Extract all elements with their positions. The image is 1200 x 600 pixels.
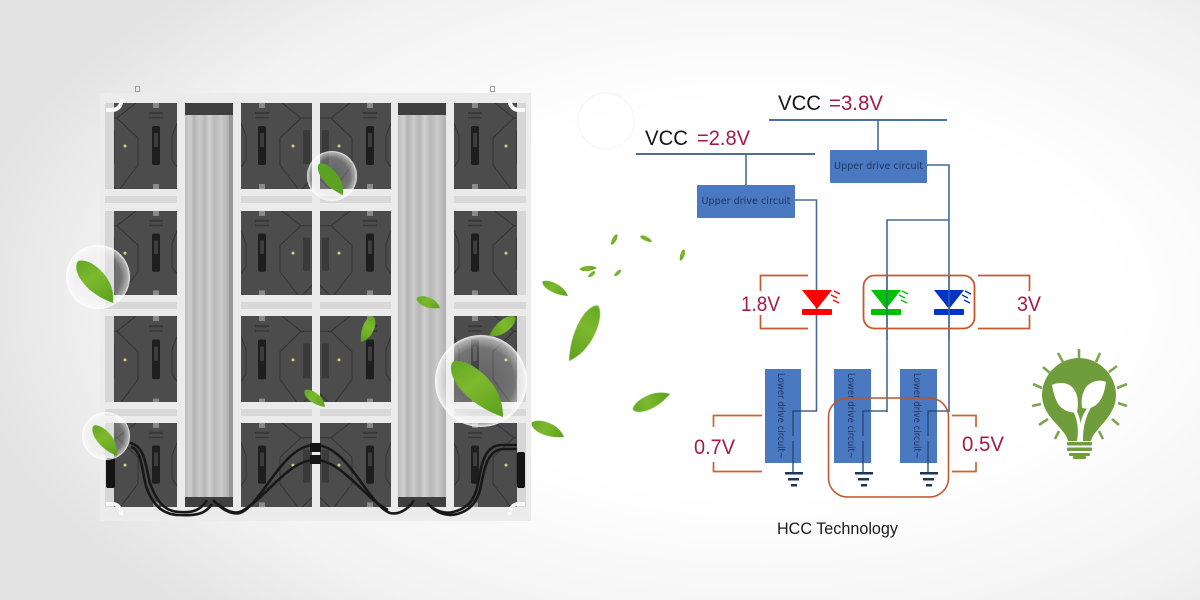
upper drive circuit left <box>697 185 795 218</box>
ground symbols <box>785 472 938 486</box>
lower drive circuit 2 <box>834 369 887 473</box>
corner brackets <box>106 99 525 515</box>
lower drive circuit 3 <box>900 369 949 473</box>
flying leaves <box>302 234 687 444</box>
0.7V bracket <box>694 416 762 472</box>
LED modules <box>106 103 525 507</box>
VCC 2.8V supply: =2.8V <box>697 127 750 150</box>
bulb base <box>1067 442 1092 459</box>
0.5V bracket <box>952 416 1004 472</box>
0.7V bracket: 0.7V <box>694 436 735 459</box>
heat sink left <box>185 115 233 497</box>
red LED <box>802 290 840 315</box>
upper drive circuit right: Upper drive circuit <box>834 161 923 172</box>
3V bracket: 3V <box>1017 293 1041 316</box>
heat sink right <box>398 115 446 497</box>
VCC 3.8V supply: =3.8V <box>829 92 883 115</box>
3V bracket <box>978 276 1041 328</box>
bubble with leaf: left <box>66 245 130 311</box>
lower drive circuit 1: Lower drive circuit~ <box>775 373 786 459</box>
cabinet frame <box>100 93 531 521</box>
frame rails <box>105 97 526 517</box>
VCC 3.8V supply <box>769 92 947 121</box>
lower drive circuit 3: Lower drive circuit~ <box>911 373 922 459</box>
upper drive circuit left: Upper drive circuit <box>702 196 791 207</box>
lower drive circuit 1 <box>765 369 817 473</box>
icon: eco light bulb <box>1032 349 1127 459</box>
mounting tabs <box>136 86 494 92</box>
green LED <box>871 290 908 315</box>
VCC 2.8V supply <box>636 127 815 155</box>
bubble with leaf: top centre <box>307 151 357 201</box>
cable connectors <box>106 443 525 488</box>
circuit wires <box>746 120 949 412</box>
bulb body <box>1042 358 1116 441</box>
lower drive circuit 2: Lower drive circuit~ <box>845 373 856 459</box>
green and blue LED highlight <box>864 276 974 328</box>
light rays <box>1032 349 1127 439</box>
1.8V bracket: 1.8V <box>741 293 780 316</box>
VCC 3.8V supply: VCC <box>778 92 821 115</box>
VCC 2.8V supply: VCC <box>645 127 688 150</box>
bubble with large leaf <box>435 335 527 427</box>
1.8V bracket <box>741 276 808 328</box>
blue LED <box>934 290 971 315</box>
bubble: top right faint <box>578 93 634 149</box>
bubble with leaf: lower left <box>82 412 130 461</box>
caption: HCC Technology <box>777 519 898 538</box>
0.5V bracket: 0.5V <box>962 433 1004 456</box>
sprout leaves <box>1052 381 1106 441</box>
lower driver highlight <box>828 398 948 497</box>
LED wires over diodes <box>887 275 949 340</box>
panel: LED cabinet rear view <box>100 86 531 521</box>
power cables <box>130 443 517 515</box>
upper drive circuit right <box>830 150 927 183</box>
panel: HCC circuit diagram <box>636 92 1041 538</box>
